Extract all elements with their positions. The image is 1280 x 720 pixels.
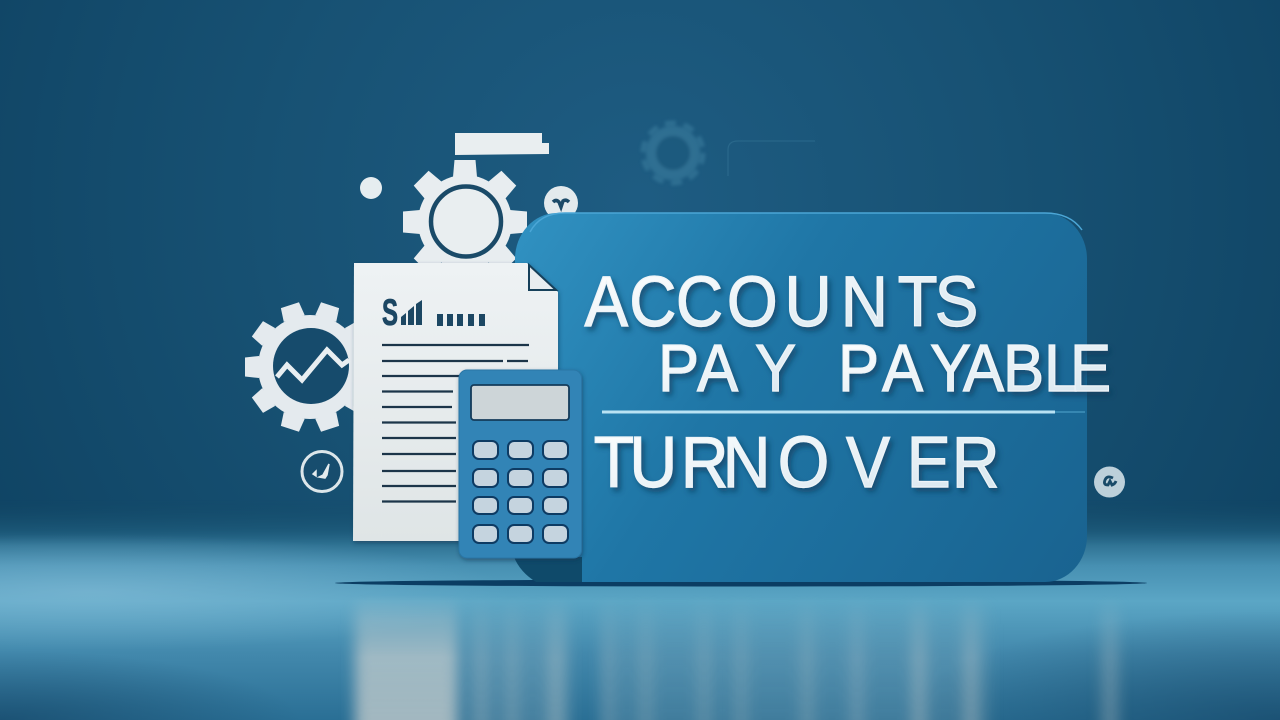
title line: pay: PAY	[658, 331, 796, 406]
calculator keypad	[473, 441, 568, 543]
refresh badge: right	[1094, 466, 1125, 498]
small refresh badge: top	[544, 186, 578, 220]
check badge	[302, 452, 342, 492]
calculator screen	[471, 385, 569, 420]
document heading symbol: S	[382, 292, 398, 333]
main blue card	[514, 213, 1087, 582]
title text	[584, 263, 1111, 503]
gear icon: top	[403, 160, 527, 284]
title line: turnover: TURNOVER	[594, 421, 1000, 503]
title line: accounts: ACCOUNTS	[584, 263, 978, 342]
document heading dashes	[437, 314, 485, 326]
banner tab above gear	[455, 133, 549, 155]
card floor shadow	[335, 580, 1147, 586]
reflective floor	[0, 520, 1280, 720]
document fold	[529, 265, 556, 290]
document text lines	[382, 345, 529, 502]
ghost gear icon	[643, 123, 703, 183]
floating dot	[360, 177, 382, 199]
calculator	[459, 370, 582, 558]
title divider	[602, 410, 1085, 414]
document heading symbol	[382, 292, 422, 333]
document	[353, 263, 558, 541]
ghost panel outline	[728, 141, 815, 176]
gear icon: chart	[245, 302, 375, 432]
title line: payable: PAYABLE	[838, 331, 1111, 406]
floor reflections	[355, 595, 1118, 720]
